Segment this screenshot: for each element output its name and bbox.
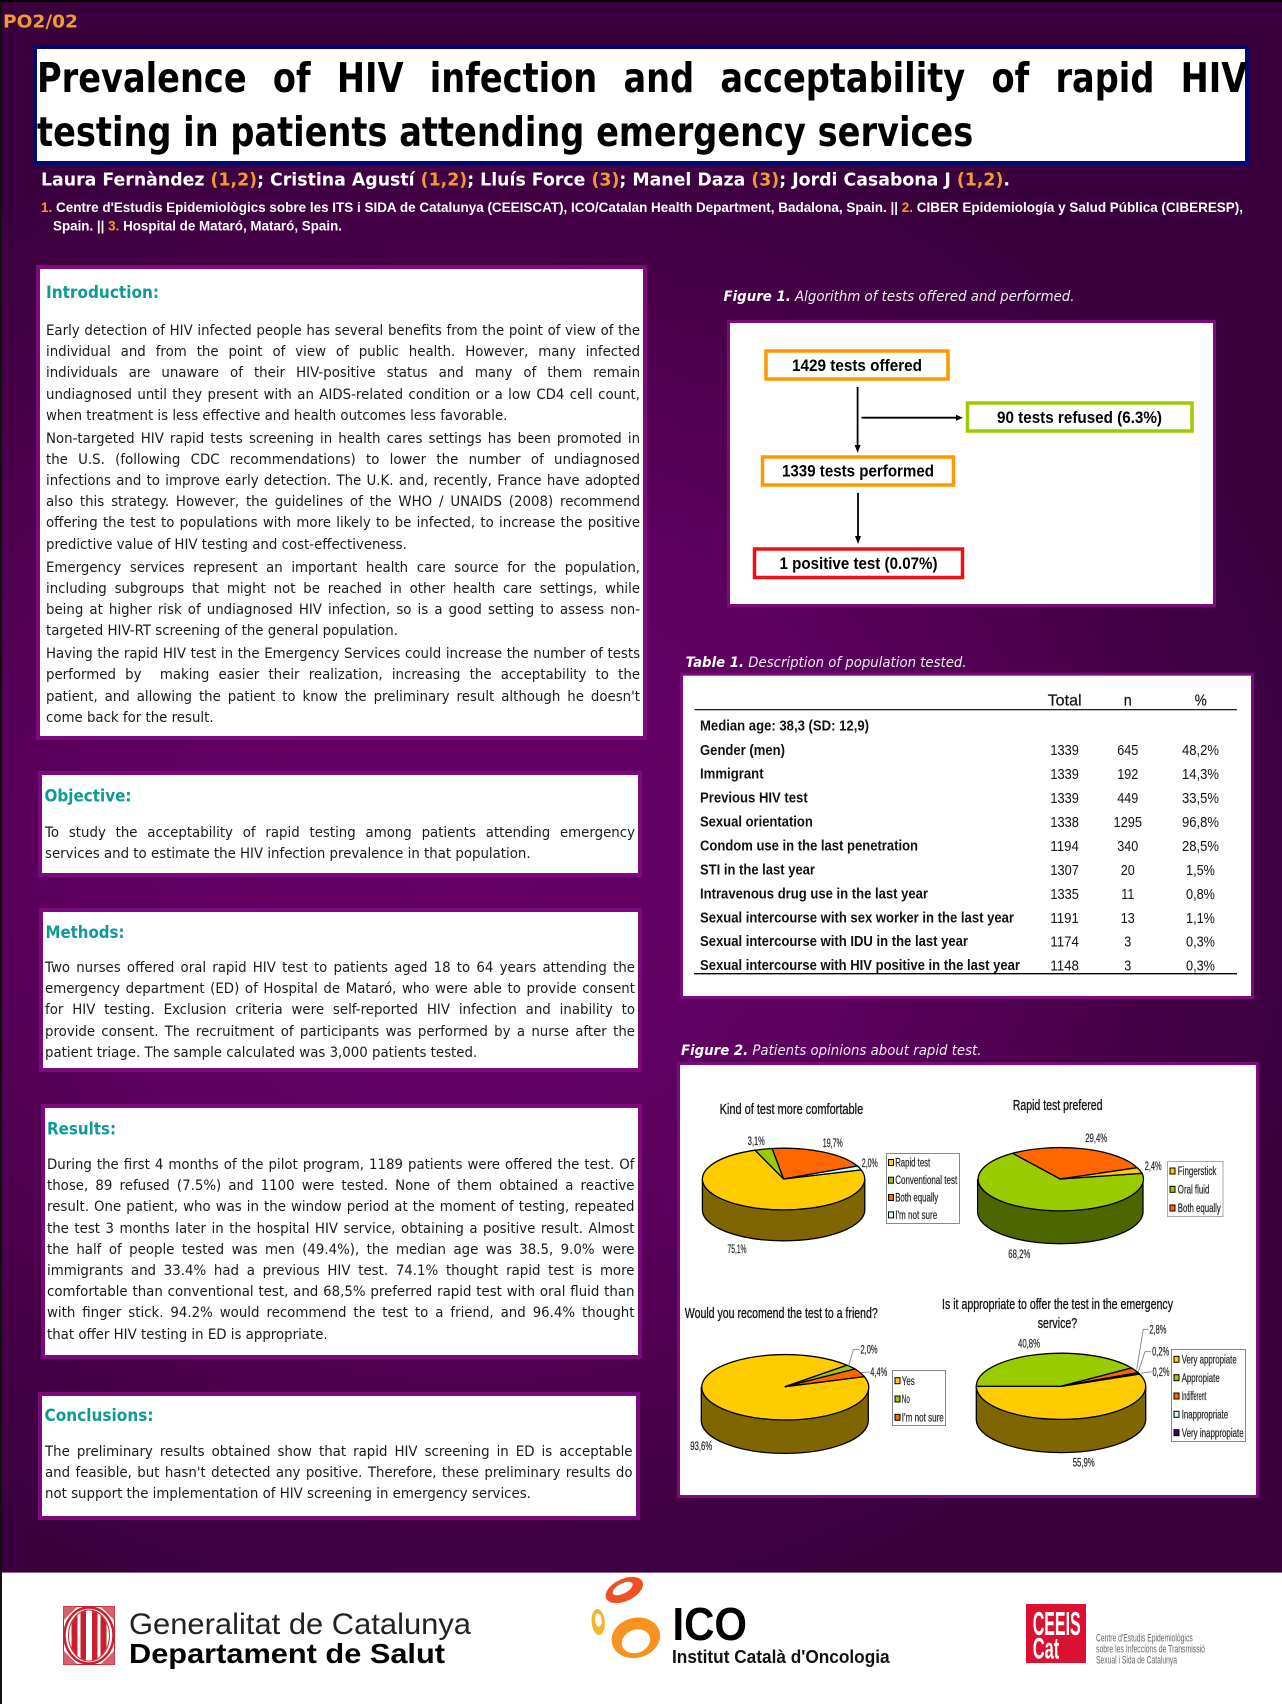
n column: 3: [1124, 934, 1131, 950]
data labels: 29,4%: [1085, 1133, 1107, 1145]
logo: ICO: [590, 1572, 891, 1667]
box: positive test: [754, 549, 962, 578]
chart title: [942, 1296, 1173, 1332]
n column: 20: [1121, 863, 1135, 879]
percent column: 0,8%: [1186, 887, 1215, 903]
leader lines: [848, 1349, 870, 1372]
figure 1 caption: Figure 1. Algorithm of tests offered and performed.: [724, 289, 1074, 305]
conclusions text: and feasible, but hasn't detected any positive. Therefore, these preliminary results do: [45, 1465, 633, 1481]
introduction text: targeted HIV-RT screening of the general population.: [46, 623, 398, 639]
results text: those, 89 refused (7.5%) and 1100 were tested. None of them obtained a reactive: [47, 1178, 635, 1194]
conclusions text: The preliminary results obtained show that rapid HIV screening in ED is acceptable: [45, 1444, 633, 1460]
data labels: 0,2%: [1152, 1346, 1169, 1358]
chart title: Is it appropriate to offer the test in the emergency: [942, 1296, 1173, 1313]
row labels: Median age: 38,3 (SD: 12,9): [700, 718, 869, 734]
logo: CEEIS Cat: Sexual i Sida de Catalunya: [1096, 1654, 1178, 1666]
row labels: STI in the last year: [700, 862, 815, 878]
data labels: 2,8%: [1149, 1324, 1166, 1336]
authors: Laura Fernàndez (1,2); Cristina Agustí (1,2); Lluís Force (3); Manel Daza (3); Jordi Casabona J (1,2).: [41, 170, 1010, 190]
title: Prevalence of HIV infection and acceptability of rapid HIV: [37, 54, 1247, 102]
total column: 1148: [1050, 958, 1079, 974]
legend: Fingerstick: [1178, 1166, 1217, 1178]
legend: Oral fluid: [1178, 1184, 1209, 1196]
legend: I'm not sure: [895, 1210, 937, 1222]
percent column: 0,3%: [1186, 934, 1215, 950]
data labels: [728, 1136, 878, 1256]
data labels: [1018, 1324, 1170, 1470]
introduction text: predictive value of HIV testing and cost-effectiveness.: [46, 537, 407, 553]
percent column: 48,2%: [1182, 743, 1219, 759]
legend: Both equally: [1178, 1203, 1221, 1215]
leader lines: [1137, 1329, 1152, 1373]
introduction text: come back for the result.: [46, 710, 214, 726]
table header: %: [1195, 692, 1207, 710]
chart title: service?: [1038, 1315, 1077, 1332]
pie side: [702, 1179, 865, 1241]
logo: CEEIS Cat: sobre les Infeccions de Transmissió: [1096, 1644, 1205, 1656]
data labels: 93,6%: [690, 1441, 712, 1453]
introduction text: undiagnosed until they present with an AIDS-related condition or a low CD4 cell count,: [46, 387, 640, 403]
row labels: Immigrant: [700, 766, 764, 782]
total column: 1191: [1050, 911, 1079, 927]
data labels: 3,1%: [748, 1136, 765, 1148]
chart title: Kind of test more comfortable: [720, 1101, 863, 1118]
row labels: Previous HIV test: [700, 790, 808, 806]
logo: CEEIS Cat: [1026, 1604, 1205, 1666]
legend: Very inappropiate: [1182, 1428, 1244, 1440]
legend: [892, 1370, 946, 1426]
box: tests refused: [968, 403, 1192, 431]
methods text: for HIV testing. Exclusion criteria were self-reported HIV infection and inability to: [45, 1002, 635, 1018]
affiliations: [41, 199, 1243, 234]
logo: ICO: Institut Català d'Oncologia: [672, 1647, 891, 1667]
panel: conclusions: [38, 1392, 640, 1520]
chart: kind of test more comfortable: [702, 1101, 960, 1256]
logo: CEEIS Cat: Cat: [1033, 1632, 1059, 1665]
panel: figure 1 flowchart: [728, 322, 1214, 606]
percent column: [1182, 743, 1219, 974]
row labels: Sexual intercourse with sex worker in the last year: [700, 910, 1014, 926]
heading: methods: Methods:: [46, 923, 124, 943]
results text: the test 3 months later in the hospital HIV service, obtaining a positive result. Almost: [47, 1221, 635, 1237]
data labels: 2,4%: [1145, 1161, 1162, 1173]
objective text: [44, 825, 635, 862]
legend: Indifferent: [1182, 1391, 1207, 1403]
legend: I'm not sure: [902, 1412, 944, 1424]
objective text: services and to estimate the HIV infection prevalence in that population.: [45, 846, 531, 862]
n column: 13: [1121, 911, 1135, 927]
row labels: Sexual intercourse with HIV positive in the last year: [700, 958, 1020, 974]
total column: 1338: [1050, 815, 1079, 831]
introduction text: Early detection of HIV infected people has several benefits from the point of view of the: [46, 323, 640, 339]
chart title: Would you recomend the test to a friend?: [685, 1305, 878, 1322]
n column: 340: [1117, 839, 1138, 855]
introduction text: being at higher risk of undiagnosed HIV infection, so is a good setting to assess non-: [46, 602, 640, 618]
pie slices: [978, 1148, 1143, 1211]
logo: CEEIS Cat: Centre d'Estudis Epidemiològics: [1096, 1632, 1193, 1644]
n column: 192: [1117, 767, 1138, 783]
introduction text: the U.S. (following CDC recommendations) to lower the number of undiagnosed: [46, 452, 640, 468]
results text: with finger stick. 94.2% would recommend the test to a friend, and 96.4% thought: [47, 1305, 635, 1321]
section headings: [44, 283, 159, 1426]
legend: Very appropiate: [1182, 1354, 1237, 1366]
data labels: 55,9%: [1073, 1458, 1095, 1470]
chart: appropriate in emergency service: [942, 1296, 1246, 1470]
arrow: offered to performed: [855, 387, 861, 453]
pie slices: [702, 1148, 865, 1210]
data labels: [1008, 1133, 1162, 1261]
methods text: emergency department (ED) of Hospital de Mataró, who were able to provide consent: [45, 981, 635, 997]
data labels: 19,7%: [823, 1138, 843, 1150]
pie side: [976, 1386, 1146, 1453]
total column: 1339: [1050, 791, 1079, 807]
pie side: [978, 1179, 1143, 1244]
introduction text: [46, 323, 640, 726]
data labels: [690, 1344, 887, 1453]
data labels: 2,0%: [860, 1344, 878, 1356]
introduction text: when treatment is less effective and health outcomes less favorable.: [46, 408, 507, 424]
figure 2 caption: Figure 2. Patients opinions about rapid test.: [681, 1043, 982, 1059]
total column: [1050, 743, 1079, 974]
percent column: 28,5%: [1182, 839, 1219, 855]
total column: 1339: [1050, 743, 1079, 759]
chart: would you recomend the test: [685, 1305, 946, 1453]
legend: [886, 1154, 960, 1224]
panel: methods: [39, 908, 642, 1072]
percent column: 0,3%: [1186, 958, 1215, 974]
data labels: 2,0%: [862, 1158, 878, 1170]
percent column: 96,8%: [1182, 815, 1219, 831]
heading: conclusions: Conclusions:: [44, 1406, 154, 1426]
conclusions text: not support the implementation of HIV screening in emergency services.: [45, 1486, 531, 1502]
conclusions text: [44, 1444, 633, 1502]
panel: table 1: [682, 674, 1252, 998]
methods text: provide consent. The recruitment of participants was performed by a nurse after the: [45, 1024, 635, 1040]
icon: orange rings: [590, 1572, 665, 1663]
introduction text: also this strategy. However, the guidelines of the WHO / UNAIDS (2008) recommend: [46, 494, 640, 510]
n column: 3: [1124, 958, 1131, 974]
legend: Both equally: [895, 1192, 938, 1204]
heading: objective: Objective:: [44, 786, 132, 806]
chart: rapid test prefered: [978, 1097, 1223, 1261]
heading: introduction: Introduction:: [46, 283, 159, 303]
introduction text: Non-targeted HIV rapid tests screening in health cares settings has been promoted in: [46, 431, 640, 447]
logo: Generalitat de Catalunya: Departament de Salut: [129, 1638, 445, 1669]
data labels: 40,8%: [1018, 1338, 1040, 1350]
n column: 1295: [1114, 815, 1142, 831]
box: tests performed: [762, 457, 954, 485]
legend: Appropiate: [1182, 1373, 1220, 1385]
methods text: [44, 960, 635, 1061]
poster code: PO2/02: [3, 12, 78, 32]
box: positive test: 1 positive test (0.07%): [780, 554, 938, 573]
introduction text: performed by making easier their realization, increasing the acceptability to the: [46, 667, 640, 683]
introduction text: infections and to improve early detection. The U.K. and, recently, France have adopted: [46, 473, 640, 489]
panel: figure 2 pie charts: [678, 1064, 1258, 1496]
percent column: 14,3%: [1182, 767, 1219, 783]
percent column: 1,5%: [1186, 863, 1215, 879]
row labels: Intravenous drug use in the last year: [700, 886, 928, 902]
legend: No: [902, 1394, 910, 1406]
row labels: Gender (men): [700, 743, 785, 759]
row labels: [700, 718, 1020, 974]
total column: 1174: [1050, 934, 1079, 950]
n column: 11: [1121, 887, 1134, 903]
box: tests performed: 1339 tests performed: [782, 462, 934, 480]
legend: Inappropriate: [1182, 1410, 1228, 1422]
n column: 645: [1117, 743, 1138, 759]
total column: 1194: [1050, 839, 1079, 855]
affiliations: Spain. || 3. Hospital de Mataró, Mataró, Spain.: [53, 218, 342, 234]
introduction text: including subgroups that might not be reached in other health care settings, while: [46, 581, 640, 597]
title: testing in patients attending emergency services: [37, 108, 973, 156]
percent column: 33,5%: [1182, 791, 1219, 807]
pie slices: [976, 1353, 1146, 1419]
results text: During the first 4 months of the pilot program, 1189 patients were offered the test. Of: [47, 1157, 635, 1173]
row labels: Condom use in the last penetration: [700, 838, 918, 854]
data labels: 75,1%: [728, 1244, 746, 1256]
introduction text: Emergency services represent an important health care source for the population,: [46, 560, 640, 576]
legend: [1168, 1162, 1223, 1216]
legend: Yes: [902, 1376, 915, 1388]
introduction text: Having the rapid HIV test in the Emergency Services could increase the number of tests: [46, 646, 640, 662]
arrow: to refused: [862, 415, 963, 421]
objective text: To study the acceptability of rapid testing among patients attending emergency: [45, 825, 635, 841]
footer band: [0, 1572, 1282, 1704]
total column: 1339: [1050, 767, 1079, 783]
box: tests offered: [766, 351, 948, 379]
logo: Generalitat de Catalunya: Generalitat de Catalunya: [129, 1608, 471, 1641]
data labels: 68,2%: [1008, 1249, 1030, 1261]
legend: Conventional test: [895, 1175, 958, 1187]
introduction text: patient, and allowing the patient to know the preliminary result although he doesn't: [46, 689, 640, 705]
pie slices: [702, 1355, 869, 1420]
table 1 caption: Table 1. Description of population tested.: [686, 655, 967, 671]
total column: 1307: [1050, 863, 1079, 879]
results text: [47, 1157, 635, 1342]
data labels: 4,4%: [870, 1367, 887, 1379]
row labels: Sexual orientation: [700, 814, 813, 830]
panel: results: [41, 1104, 642, 1359]
heading: results: Results:: [47, 1120, 116, 1140]
introduction text: individual and from the point of view of public health. However, many infected: [46, 344, 640, 360]
n column: 449: [1117, 791, 1138, 807]
table header: n: [1124, 692, 1132, 710]
table header: Total: [1048, 692, 1082, 710]
box: tests offered: 1429 tests offered: [792, 356, 922, 375]
logo: CEEIS Cat: CEEIS: [1033, 1605, 1081, 1642]
legend: [1172, 1350, 1246, 1442]
introduction text: individuals are unaware of their HIV-positive status and many of them remain: [46, 365, 640, 381]
results text: that offer HIV testing in ED is appropriate.: [47, 1326, 328, 1342]
data labels: 0,2%: [1152, 1367, 1170, 1379]
results text: comfortable than conventional test, and 68,5% preferred rapid test with oral fluid than: [47, 1284, 635, 1300]
table header: [1048, 692, 1207, 710]
title: [33, 45, 1249, 165]
logo: Generalitat de Catalunya: [64, 1606, 471, 1669]
results text: the half of people tested was men (49.4%), the median age was 38.5, 9.0% were: [47, 1242, 635, 1258]
introduction text: offering the test to populations with more likely to be infected, to increase the positive: [46, 515, 640, 531]
row labels: Sexual intercourse with IDU in the last year: [700, 934, 968, 950]
results text: result. One patient, who was in the window period at the moment of testing, repeated: [47, 1199, 635, 1215]
methods text: Two nurses offered oral rapid HIV test to patients aged 18 to 64 years attending the: [45, 960, 635, 976]
box: tests refused: 90 tests refused (6.3%): [997, 408, 1162, 427]
results text: immigrants and 33.4% had a previous HIV test. 74.1% thought rapid test is more: [47, 1263, 635, 1279]
panel: introduction: [36, 265, 647, 740]
total column: 1335: [1050, 887, 1079, 903]
legend: Rapid test: [895, 1158, 931, 1170]
arrow: performed to positive: [855, 493, 861, 544]
pie side: [701, 1387, 868, 1453]
logo: ICO: ICO: [672, 1598, 747, 1650]
methods text: patient triage. The sample calculated was 3,000 patients tested.: [45, 1045, 477, 1061]
chart title: Rapid test prefered: [1013, 1097, 1102, 1114]
n column: [1114, 743, 1142, 974]
percent column: 1,1%: [1186, 911, 1215, 927]
icon: shield: [64, 1606, 114, 1666]
affiliations: 1. Centre d'Estudis Epidemiològics sobre les ITS i SIDA de Catalunya (CEEISCAT), ICO/Catalan Health Department, Badalona, Spain. || 2. CIBER Epidemiología y Salud Pública (CIBERESP),: [41, 199, 1243, 215]
panel: objective: [38, 771, 642, 877]
